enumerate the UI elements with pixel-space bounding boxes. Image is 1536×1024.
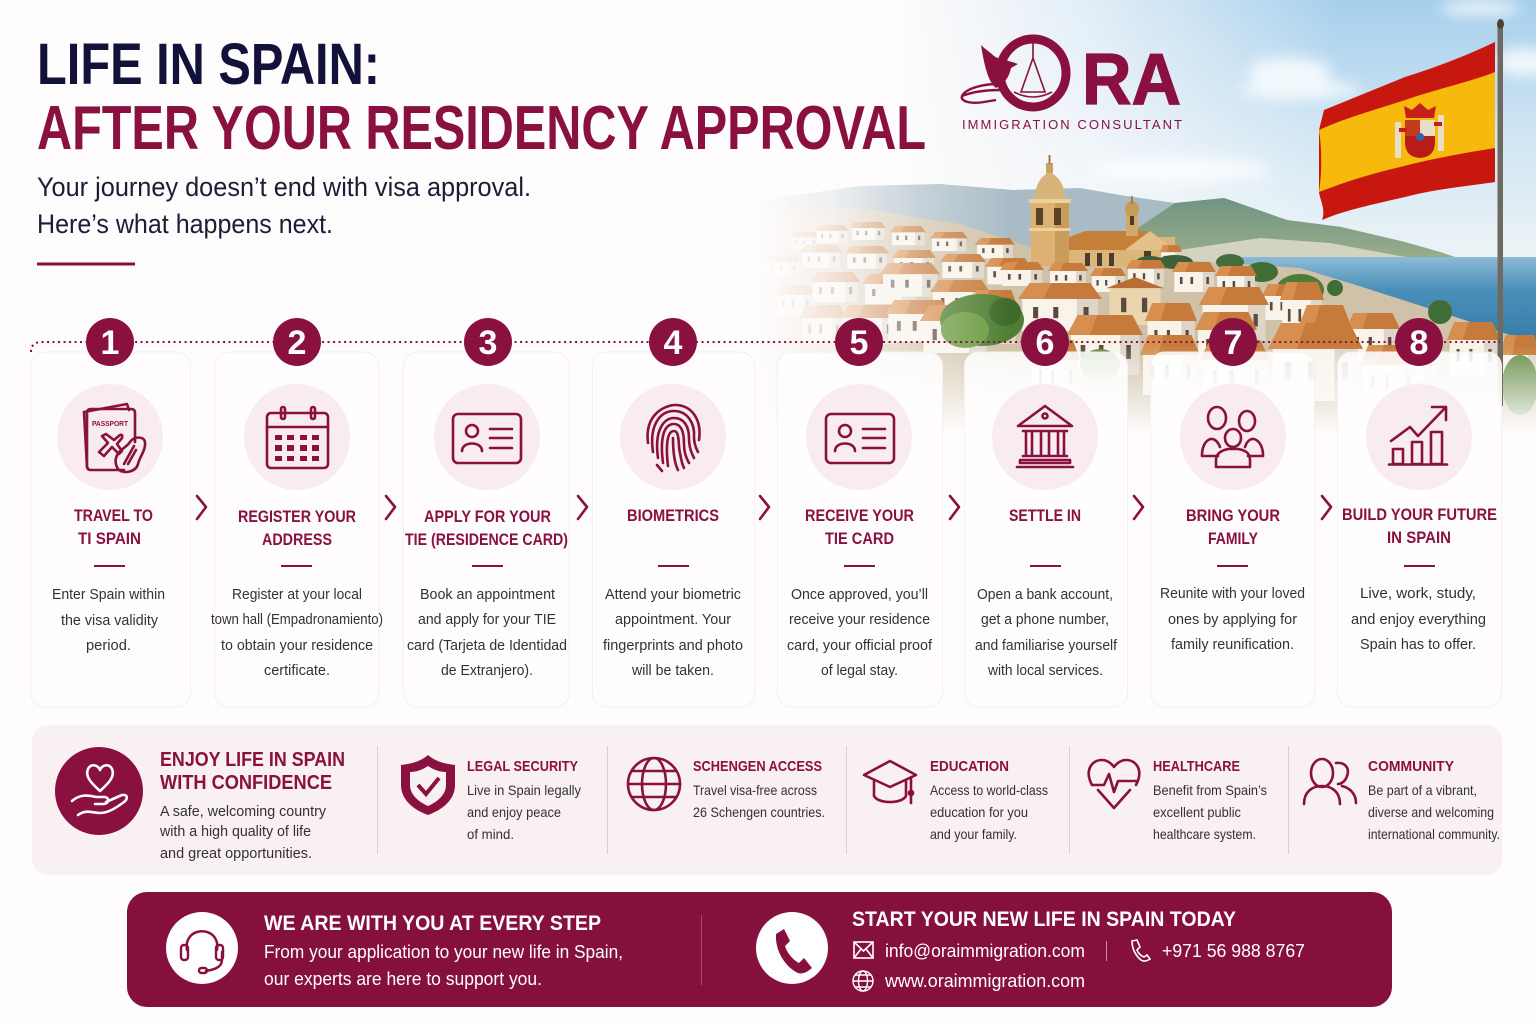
step title: [74, 506, 153, 548]
benefit: schengen access: [693, 758, 825, 820]
icon: community people: [1304, 759, 1356, 804]
icon: calendar: [244, 384, 350, 490]
panel: step 2 register: [211, 318, 383, 707]
step text: Once approved, you’ll: [791, 586, 928, 603]
panel: benefits band: [32, 725, 1502, 875]
step title: RECEIVE YOUR: [805, 506, 914, 525]
step text: period.: [86, 637, 131, 654]
step title: BIOMETRICS: [627, 506, 719, 525]
subtitle: Here’s what happens next.: [37, 209, 333, 239]
timeline dotted connector: [31, 342, 1500, 352]
step text: [787, 586, 933, 679]
arrow 5: [950, 496, 959, 519]
step text: [52, 586, 165, 654]
support message: our experts are here to support you.: [264, 969, 542, 989]
benefit: community: COMMUNITY: [1368, 758, 1454, 775]
benefit: legal security: of mind.: [467, 826, 514, 842]
icon: email: [854, 942, 873, 958]
panel: step 8 future: [1338, 318, 1502, 707]
benefit: community: Be part of a vibrant,: [1368, 782, 1477, 798]
icon: globe: [628, 758, 680, 810]
benefit: healthcare: Benefit from Spain’s: [1153, 782, 1267, 798]
text: enjoy life: A safe, welcoming country: [160, 803, 326, 820]
title: LIFE IN SPAIN:: [37, 32, 380, 97]
step text: town hall (Empadronamiento): [211, 611, 383, 628]
number badge 7: [1209, 318, 1257, 366]
number badge 4: [649, 318, 697, 366]
step text: Spain has to offer.: [1360, 636, 1476, 653]
arrow 4: [760, 496, 769, 519]
arrow 1: [197, 496, 206, 519]
number badge 5: 5: [850, 324, 868, 362]
logo: ORA Immigration Consultant: IMMIGRATION CONSULTANT: [962, 117, 1182, 132]
title: [37, 32, 926, 163]
icon: heart with pulse: [1089, 760, 1139, 808]
panel: step 4 biometrics: [592, 318, 754, 707]
icon: small globe: [853, 971, 873, 991]
step text: Book an appointment: [420, 586, 556, 603]
number badge 8: [1395, 318, 1443, 366]
icon: residence card: [434, 384, 540, 490]
benefit: healthcare: healthcare system.: [1153, 826, 1256, 842]
contact details: +971 56 988 8767: [1162, 941, 1305, 961]
benefit: education: Access to world-class: [930, 782, 1048, 798]
number badge 5: [835, 318, 883, 366]
step text: and apply for your TIE: [418, 611, 556, 628]
icon: graduation cap: [864, 761, 916, 803]
step text: to obtain your residence: [221, 637, 373, 654]
step text: Register at your local: [232, 586, 362, 603]
benefit: community: international community.: [1368, 826, 1500, 842]
subtitle: Your journey doesn’t end with visa approval.: [37, 172, 531, 202]
step title: SETTLE IN: [1009, 506, 1081, 525]
step text: certificate.: [264, 662, 330, 679]
icon: heart in hand: [55, 747, 143, 835]
step title: TIE (RESIDENCE CARD): [405, 530, 568, 549]
left hillside houses: [765, 222, 1031, 344]
arrow 7: [1322, 496, 1331, 519]
step text: ones by applying for: [1168, 611, 1297, 628]
benefit: legal security: and enjoy peace: [467, 804, 561, 820]
benefit: schengen access: 26 Schengen countries.: [693, 804, 825, 820]
icon: bank building: [992, 384, 1098, 490]
logo: ORA Immigration Consultant: RA: [1082, 40, 1181, 120]
step text: Attend your biometric: [605, 586, 741, 603]
text: enjoy life: [159, 803, 326, 862]
step title: ADDRESS: [262, 530, 332, 549]
step text: receive your residence: [789, 611, 930, 628]
number badge 4: 4: [664, 324, 683, 362]
title: AFTER YOUR RESIDENCY APPROVAL: [37, 94, 926, 163]
icon: residence card: [806, 384, 912, 490]
step text: and familiarise yourself: [975, 637, 1118, 654]
heading: enjoy life: WITH CONFIDENCE: [160, 772, 332, 794]
step text: get a phone number,: [981, 611, 1109, 628]
panel: step 1 travel: [30, 318, 190, 707]
step title: REGISTER YOUR: [238, 507, 356, 526]
step title: [405, 507, 568, 549]
benefit: schengen access: SCHENGEN ACCESS: [693, 758, 822, 775]
heading: enjoy life: ENJOY LIFE IN SPAIN: [160, 749, 345, 771]
step text: [603, 586, 743, 679]
text: enjoy life: with a high quality of life: [159, 823, 311, 840]
icon: family: [1180, 384, 1286, 490]
number badge 6: 6: [1036, 324, 1054, 362]
arrow 6: [1134, 496, 1143, 519]
icon: passport: [57, 384, 163, 490]
support message: [264, 912, 623, 989]
number badge 3: [464, 318, 512, 366]
number badge 8: 8: [1410, 324, 1428, 362]
number badge 1: [86, 318, 134, 366]
icon: phone: [756, 912, 828, 984]
benefit: community: diverse and welcoming: [1368, 804, 1494, 820]
trees in front: [940, 294, 1536, 415]
support message: From your application to your new life in Spain,: [264, 942, 623, 962]
icon: growth chart: [1366, 384, 1472, 490]
number badge 7: 7: [1224, 324, 1242, 362]
icon: fingerprint: [620, 384, 726, 490]
panel: step 7 family: [1150, 318, 1314, 707]
contact details: [852, 908, 1305, 991]
step title: IN SPAIN: [1387, 528, 1451, 547]
step title: [1342, 505, 1497, 547]
icon: passport: PASSPORT: [92, 419, 128, 428]
benefit: healthcare: excellent public: [1153, 804, 1241, 820]
step title: [805, 506, 914, 548]
arrow 2: [386, 496, 395, 519]
step text: card (Tarjeta de Identidad: [407, 637, 567, 654]
benefit: education: EDUCATION: [930, 758, 1009, 775]
icon: Spanish flag on pole: [1319, 19, 1504, 406]
step text: [1351, 585, 1486, 653]
panel: contact footer: [127, 892, 1392, 1007]
subtitle: [37, 172, 531, 266]
step text: [975, 586, 1118, 679]
town houses: [920, 260, 1536, 405]
text: enjoy life: and great opportunities.: [160, 845, 312, 862]
step title: APPLY FOR YOUR: [424, 507, 551, 526]
number badge 2: [273, 318, 321, 366]
heading: enjoy life: [160, 749, 345, 794]
step text: will be taken.: [631, 662, 714, 679]
step text: appointment. Your: [615, 611, 731, 628]
benefit: community: [1368, 758, 1500, 842]
step title: BUILD YOUR FUTURE: [1342, 505, 1497, 524]
step title: FAMILY: [1208, 529, 1259, 548]
step text: de Extranjero).: [441, 662, 533, 679]
step text: and enjoy everything: [1351, 611, 1486, 628]
church: [1029, 155, 1182, 267]
benefit: education: and your family.: [930, 826, 1017, 842]
step text: with local services.: [987, 662, 1103, 679]
step title: TIE CARD: [825, 529, 894, 548]
step title: BRING YOUR: [1186, 506, 1280, 525]
panel: step 6 settle in: [964, 318, 1128, 707]
number badge 2: 2: [288, 324, 306, 362]
step title: [238, 507, 356, 549]
contact details: info@oraimmigration.com: [885, 941, 1085, 961]
benefit: legal security: [467, 758, 581, 842]
benefit: education: education for you: [930, 804, 1028, 820]
arrow 3: [578, 496, 587, 519]
benefit: legal security: Live in Spain legally: [467, 782, 581, 798]
step text: [407, 586, 567, 679]
benefit: healthcare: HEALTHCARE: [1153, 758, 1240, 775]
step text: Enter Spain within: [52, 586, 165, 603]
step text: Open a bank account,: [977, 586, 1113, 603]
number badge 1: 1: [101, 324, 119, 362]
contact details: START YOUR NEW LIFE IN SPAIN TODAY: [852, 908, 1236, 931]
step title: TI SPAIN: [78, 529, 141, 548]
step text: family reunification.: [1171, 636, 1294, 653]
number badge 3: 3: [479, 324, 497, 362]
step text: [1160, 585, 1305, 653]
number badge 6: [1021, 318, 1069, 366]
icon: shield: [401, 755, 455, 815]
step title: TRAVEL TO: [74, 506, 153, 525]
step text: Live, work, study,: [1360, 585, 1476, 602]
step text: card, your official proof: [787, 637, 933, 654]
panel: step 5 receive: [778, 318, 942, 707]
step text: of legal stay.: [821, 662, 898, 679]
step text: the visa validity: [61, 612, 158, 629]
support message: WE ARE WITH YOU AT EVERY STEP: [264, 912, 601, 935]
icon: headset: [166, 912, 238, 984]
step text: Reunite with your loved: [1160, 585, 1305, 602]
benefit: education: [930, 758, 1048, 842]
icon: small phone: [1132, 940, 1150, 961]
panel: step 3 apply: [404, 318, 570, 707]
step text: fingerprints and photo: [603, 637, 743, 654]
trees behind town: [1136, 254, 1452, 324]
benefit: healthcare: [1153, 758, 1267, 842]
logo: ORA Immigration Consultant: [962, 39, 1182, 132]
contact details: www.oraimmigration.com: [884, 971, 1085, 991]
step text: [211, 586, 383, 679]
benefit: legal security: LEGAL SECURITY: [467, 758, 578, 775]
hero image: Spanish coastal town: [745, 0, 1536, 442]
step title: [1186, 506, 1280, 548]
benefit: schengen access: Travel visa-free across: [693, 782, 817, 798]
